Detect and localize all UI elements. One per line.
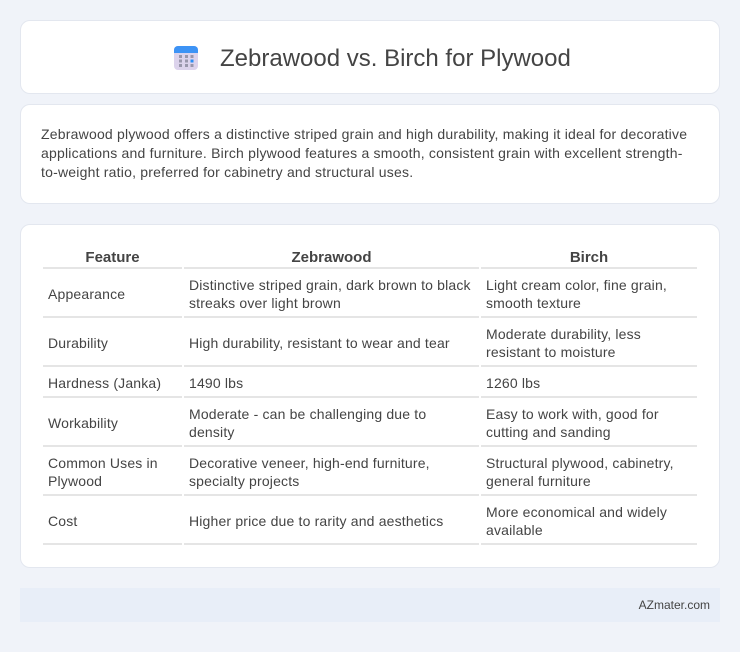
table rows: 1260 lbs [486,375,540,391]
table rows: smooth texture [486,295,581,311]
text block: summary: applications and furniture. Birch plywood features a smooth, consistent grain with excellent strength- [41,145,683,161]
table rows: Structural plywood, cabinetry, [486,455,674,471]
table rows: Hardness (Janka) [48,375,161,391]
table rows: 1490 lbs [189,375,243,391]
table rows: specialty projects [189,473,299,489]
table rows: streaks over light brown [189,295,341,311]
text block: summary: Zebrawood plywood offers a distinctive striped grain and high durability, making it ideal for decorative [41,126,687,142]
panel: comparison table [20,224,720,568]
panel: title card [20,20,720,94]
table rows: Appearance [48,286,125,302]
table rows: Moderate durability, less [486,326,641,342]
footer text: AZmater.com [639,598,710,612]
table header: Zebrawood [291,249,372,266]
title: Zebrawood vs. Birch for Plywood [220,45,571,72]
table rows [43,267,697,545]
text block: summary [41,126,687,180]
table rows: More economical and widely [486,504,667,520]
table rows: Plywood [48,473,102,489]
table rows: cutting and sanding [486,424,611,440]
footer bar [20,588,720,622]
table header: Feature [85,249,140,266]
table rows: density [189,424,235,440]
table rows: Durability [48,335,108,351]
table rows: Cost [48,513,77,529]
table header: Birch [570,249,608,266]
text block: summary: to-weight ratio, preferred for cabinetry and structural uses. [41,164,413,180]
table rows: Easy to work with, good for [486,406,659,422]
table rows: High durability, resistant to wear and tear [189,335,450,351]
table header [85,249,608,266]
icon: calendar [174,46,198,70]
table rows: Workability [48,415,118,431]
panel: summary [20,104,720,204]
table rows: resistant to moisture [486,344,616,360]
table rows: Distinctive striped grain, dark brown to black [189,277,471,293]
table rows: general furniture [486,473,591,489]
table rows: Moderate - can be challenging due to [189,406,426,422]
table rows: Common Uses in [48,455,158,471]
table rows: Light cream color, fine grain, [486,277,667,293]
table rows: available [486,522,543,538]
table rows: Higher price due to rarity and aesthetics [189,513,443,529]
table rows: Decorative veneer, high-end furniture, [189,455,430,471]
